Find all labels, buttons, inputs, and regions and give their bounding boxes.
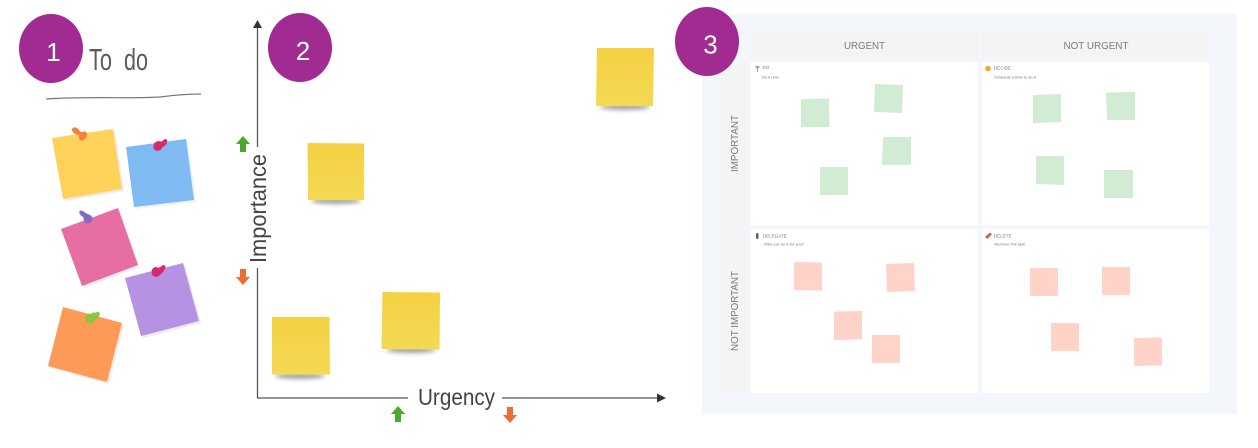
sticky note: top right [596, 48, 654, 110]
quadrant: do: Do it now [762, 74, 779, 80]
panel: to do list [46, 42, 201, 384]
row header: IMPORTANT [719, 62, 748, 225]
icon: decide [985, 66, 991, 71]
arrow: importance down [236, 269, 250, 285]
arrow: importance up [236, 136, 250, 152]
quadrant: do [751, 62, 978, 225]
icon: crimson pin [152, 264, 167, 277]
row header: NOT IMPORTANT [719, 229, 748, 393]
icon: do [755, 66, 760, 72]
quadrant: delete: Remove this task [994, 242, 1025, 246]
badge: 3 [675, 7, 739, 76]
icon: delete [985, 232, 992, 239]
badge: 1 [19, 14, 83, 83]
sticky note: bottom left [272, 317, 330, 379]
quadrant: delegate: Who can do it for you? [764, 242, 805, 246]
icon: orange pin [71, 126, 89, 142]
sticky note: bottom middle [382, 292, 440, 353]
sticky note: important, low urgency [308, 143, 364, 204]
column header: URGENT: URGENT [844, 40, 886, 52]
icon: purple pin [78, 209, 92, 224]
icon: magenta pin [151, 138, 169, 153]
column header: NOT URGENT [982, 32, 1209, 58]
arrow: urgency up [391, 406, 405, 422]
quadrant: delegate: DELEGATE [763, 234, 787, 238]
quadrant: decide [982, 62, 1209, 225]
badge: 1: 1 [46, 37, 61, 67]
note: yellow [52, 129, 124, 201]
column header: NOT URGENT: NOT URGENT [1064, 40, 1129, 52]
row header: NOT IMPORTANT: NOT IMPORTANT [729, 270, 741, 351]
heading: To do: do [124, 42, 148, 77]
heading: To do: To [89, 42, 112, 77]
note: pink [61, 208, 140, 288]
quadrant: do: DO [762, 65, 770, 70]
quadrant: delete: DELETE [994, 234, 1012, 238]
quadrant: delegate [751, 229, 978, 393]
panel: Eisenhower matrix [702, 14, 1237, 414]
quadrant: decide: Schedule a time to do it [994, 74, 1037, 80]
red notes [1030, 267, 1162, 366]
quadrant: delete [982, 229, 1209, 393]
panel: urgency importance chart [236, 20, 666, 423]
note: blue [126, 139, 196, 209]
badge: 3: 3 [703, 30, 718, 60]
icon: delegate [756, 233, 758, 239]
horizontal axis [257, 397, 660, 399]
badge: 2 [268, 13, 332, 82]
red notes [794, 262, 915, 363]
quadrant: decide: DECIDE [994, 66, 1011, 70]
row header: IMPORTANT: IMPORTANT [729, 114, 741, 172]
note: purple [125, 263, 201, 338]
axis label: Importance: Importance [245, 154, 271, 263]
arrow: urgency down [503, 407, 517, 423]
green notes [1033, 92, 1135, 198]
note: orange [48, 307, 124, 384]
column header: URGENT [751, 32, 978, 58]
axis label: Urgency: Urgency [418, 384, 495, 410]
icon: green pin [85, 310, 101, 324]
heading: To do [89, 42, 148, 77]
badge: 2: 2 [296, 36, 310, 66]
green notes [801, 84, 911, 195]
vertical axis [256, 26, 258, 398]
